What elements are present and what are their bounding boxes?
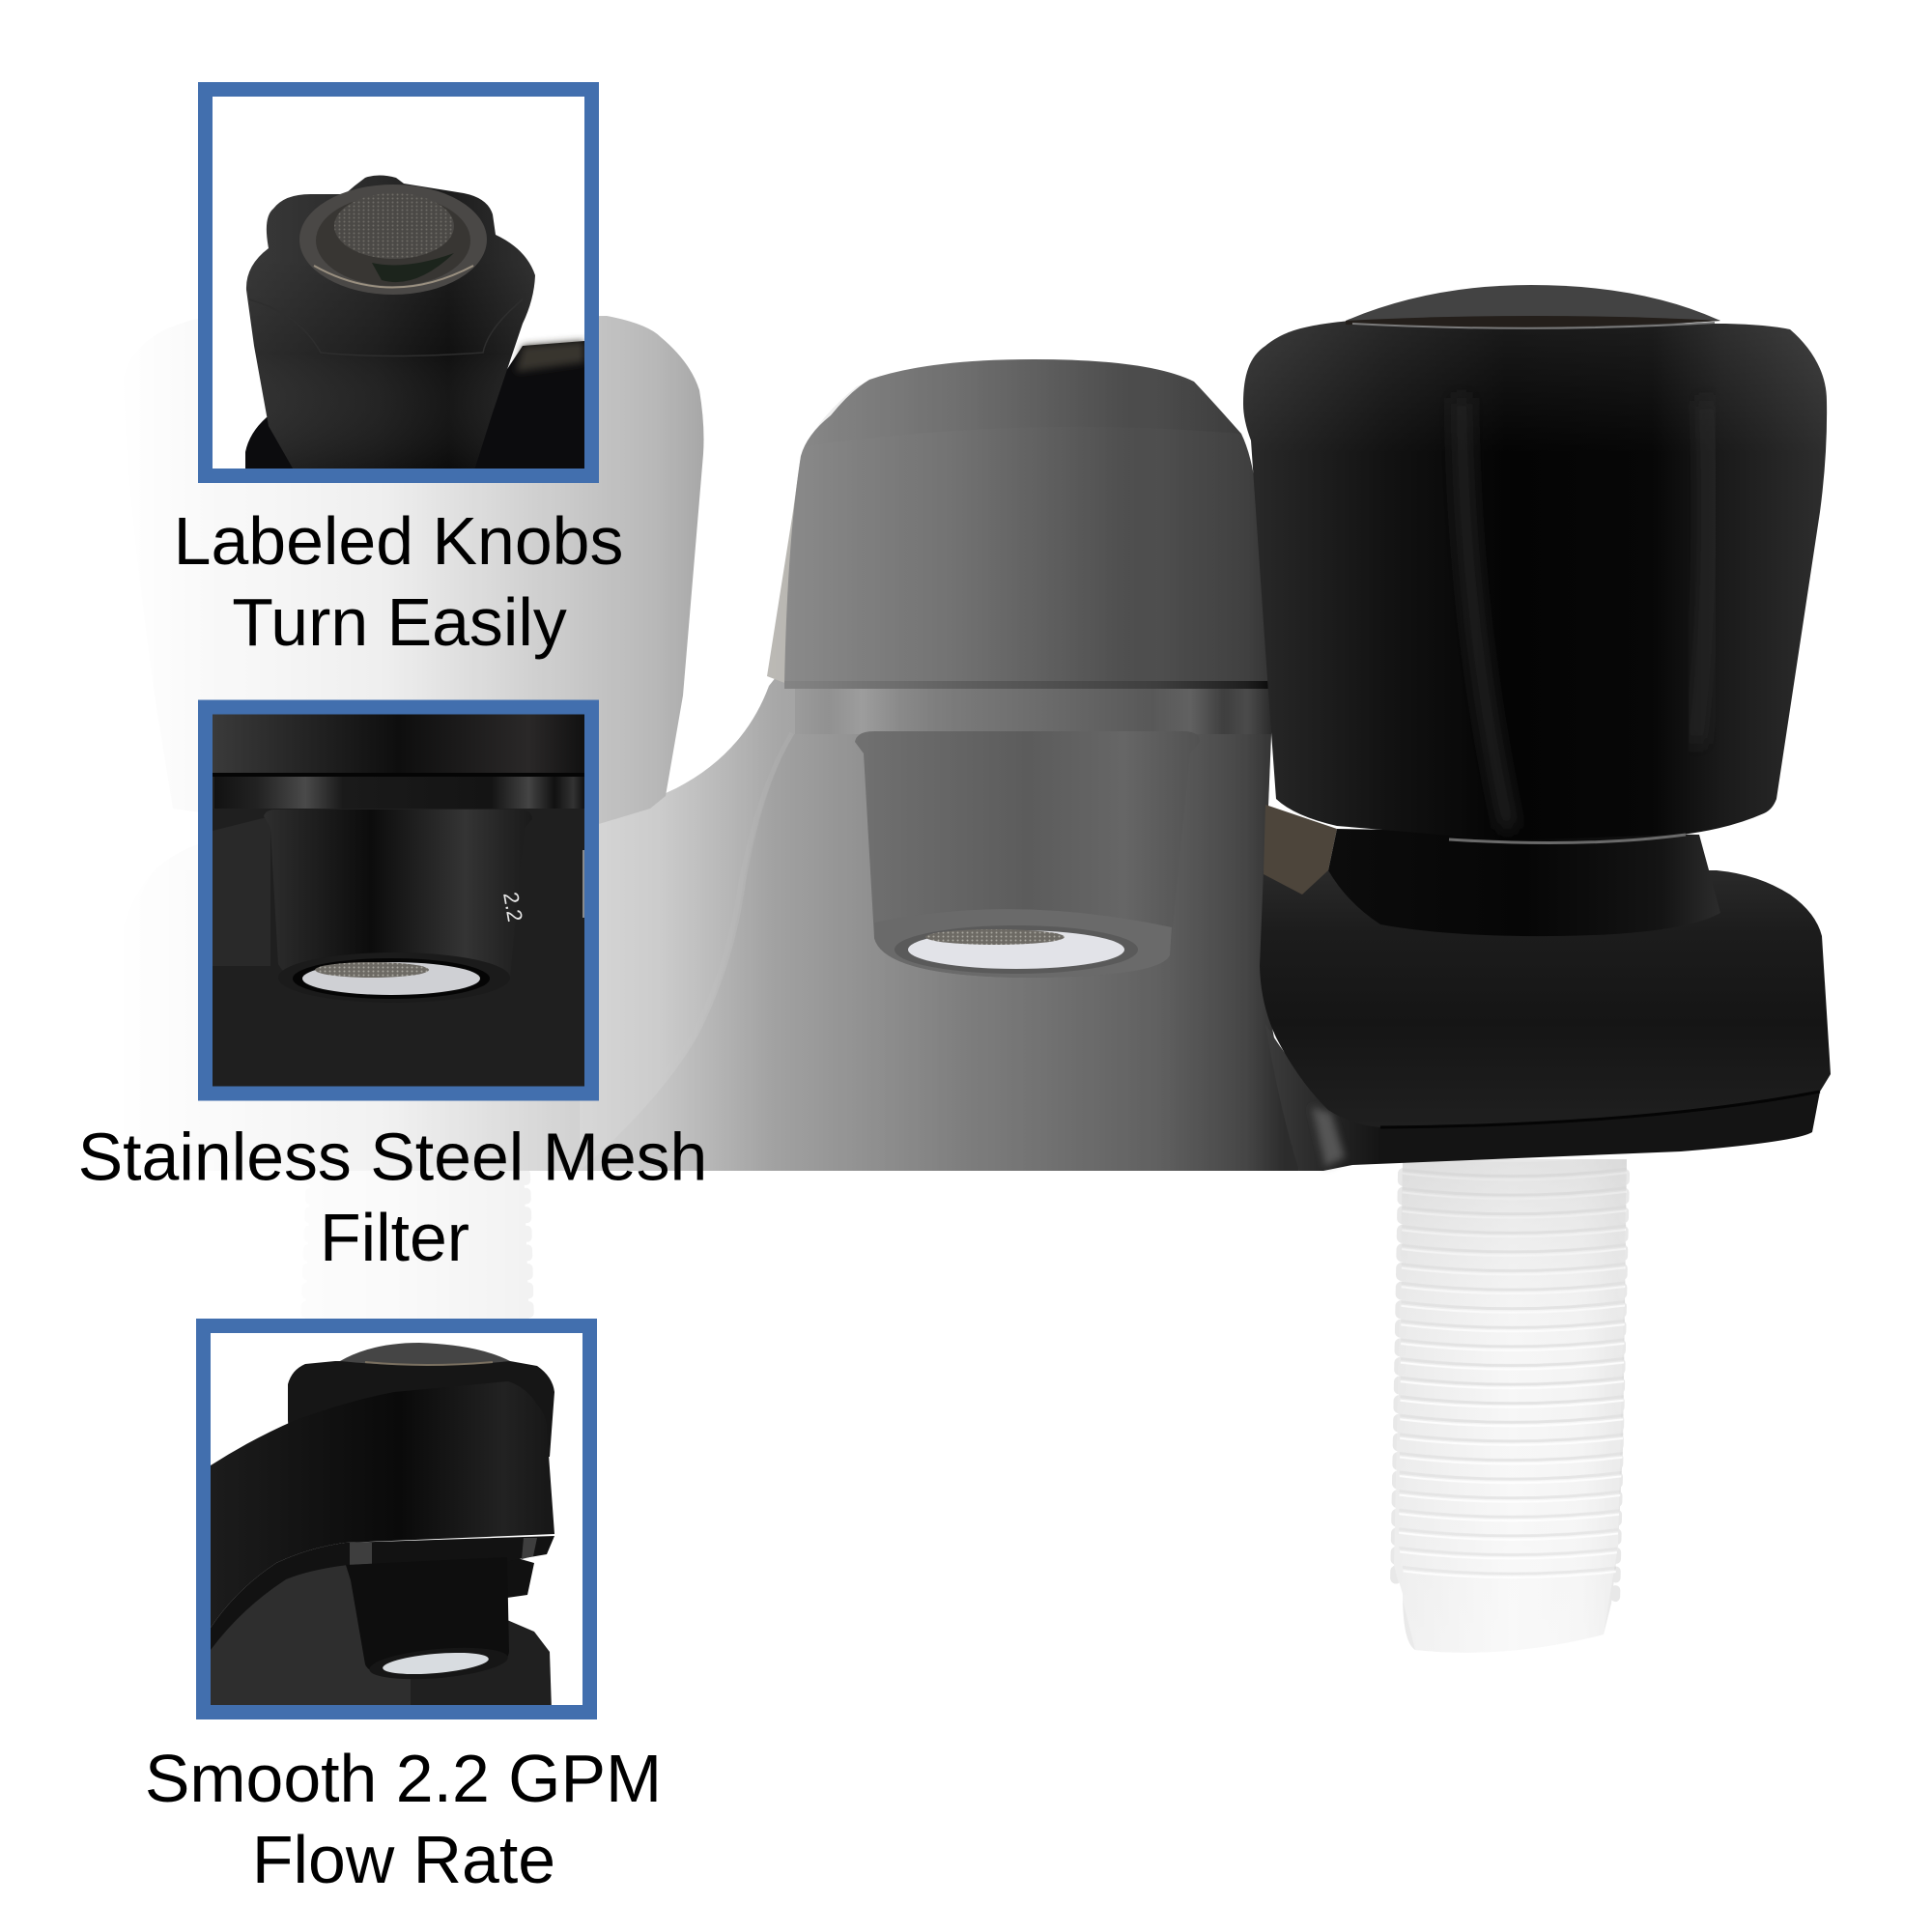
panel: stainless steel mesh filter inset [213,714,584,1089]
faucet: silver ring under knob [1449,835,1686,843]
faucet: knob collar [1328,829,1720,936]
faucet: tan reflection near right base [1264,805,1337,895]
inset flow: band [211,1536,554,1650]
inset mesh: steel mesh [315,962,429,978]
inset flow: aerator [346,1557,509,1678]
inset mesh: aerator rim [278,952,510,1003]
label: stainless steel mesh: Stainless Steel Mesh [78,1119,707,1194]
faucet: right base [1260,870,1831,1127]
faucet: front curve of body [611,733,792,1114]
inset mesh: bright sliver [582,850,584,918]
inset knob: rear base [245,341,584,473]
inset flow: lens [340,1343,510,1366]
faucet: aerator: 2.2 [1159,835,1190,871]
inset flow: rear spout piece [507,1555,534,1598]
faucet: base lower edge [1380,1092,1820,1127]
inset flow: lower body [211,1560,411,1710]
label: labeled knobs: Labeled Knobs [174,503,623,579]
label: flow rate: Flow Rate [252,1822,555,1897]
faucet: right knob [1243,321,1827,840]
faucet: threaded stem [1394,1159,1627,1653]
inset mesh: lower body shade [213,809,584,1089]
inset mesh: band [214,777,584,809]
frame: stainless steel mesh inset [205,707,591,1094]
faucet: knob lens [1346,285,1720,328]
inset mesh: flow marking: 2.2 [498,891,527,923]
inset flow: rear knob [288,1361,554,1457]
inset mesh: spout body [213,714,584,776]
panel: flow rate inset [211,1343,554,1705]
faucet: deck body [103,667,1299,1171]
label: filter: Filter [320,1200,469,1275]
faded left and centre of faucet [260,316,1299,1319]
inset knob: body [246,176,535,473]
inset knob: lens [299,185,487,295]
faucet: dome cap shade [813,384,863,433]
frame: flow rate inset [203,1325,589,1712]
inset mesh: seam [213,773,584,777]
faucet: plate sheen [1312,1107,1345,1167]
faucet: spout dome [784,359,1273,689]
faucet: aerator [855,731,1200,978]
inset mesh: aerator [264,810,498,970]
frame: labeled knobs inset [205,89,591,475]
faucet: tan sliver beside dome [767,456,801,684]
faucet: front body shade [1268,734,1299,1171]
inset flow: spout [211,1381,554,1628]
inset knob: tan edge [516,341,584,372]
inset knob: flute line [319,307,514,357]
label: turn easily: Turn Easily [232,584,567,660]
panel: labeled knobs inset [245,176,584,469]
faucet: spout band [795,689,1271,734]
label: smooth 2.2 GPM: Smooth 2.2 GPM [145,1741,662,1816]
inset flow: base lower right [411,1621,552,1705]
faucet: right lower plate [1265,1024,1820,1171]
faucet: left base [103,850,580,1171]
faucet: left threaded stem [305,1164,529,1323]
faucet: left knob [260,316,703,824]
faucet: spout seam [784,681,1274,689]
